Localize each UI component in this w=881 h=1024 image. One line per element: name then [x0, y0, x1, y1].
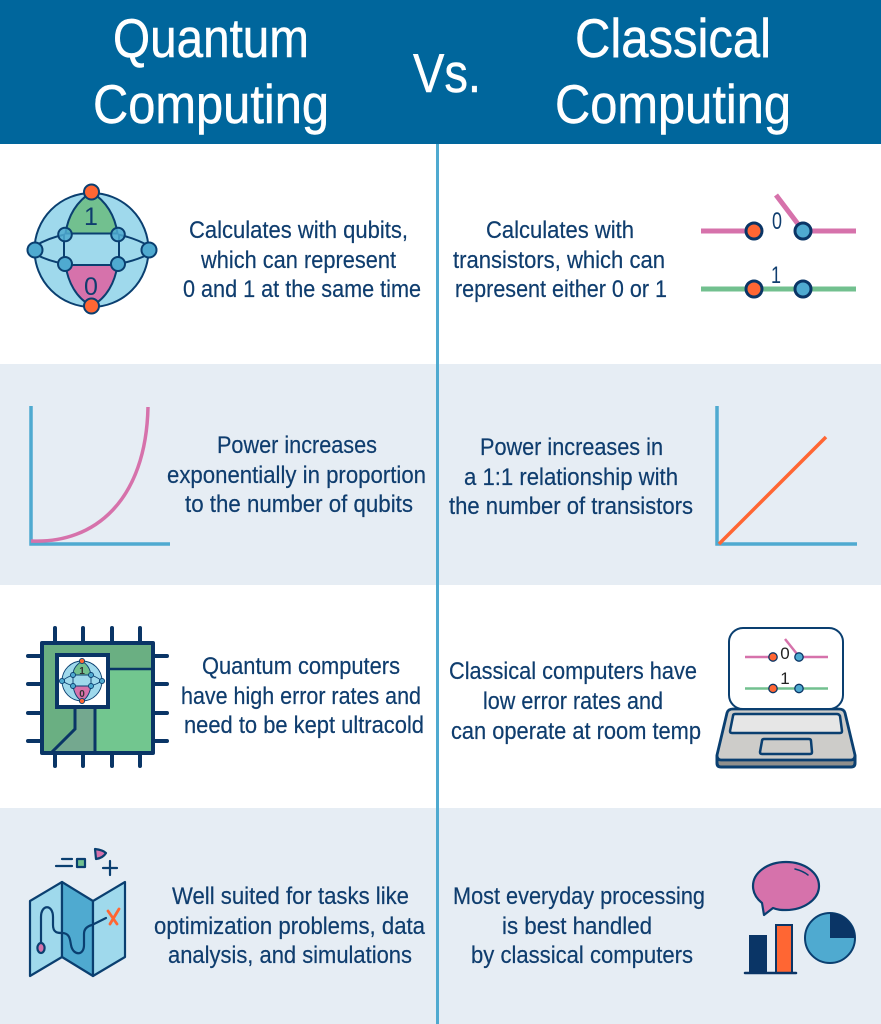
text: qubits: Calculates with qubits, — [189, 217, 408, 244]
center divider — [436, 144, 439, 1024]
text: transistors: transistors, which can — [453, 247, 665, 274]
icon: small qubit sphere — [59, 658, 105, 704]
icon: quantum chip — [28, 628, 167, 766]
panel: row 1 qubits vs transistors — [28, 184, 856, 314]
text: low error rates: low error rates and — [483, 688, 663, 715]
icon: qubit sphere — [28, 184, 156, 314]
icon: small qubit sphere: 1 — [79, 666, 85, 677]
icon: transistor switches: 1 — [771, 262, 781, 289]
icon: speech bubble, bars and pie — [745, 862, 855, 973]
heading: Classical Computing: Classical — [575, 7, 771, 69]
heading: Quantum Computing — [93, 7, 329, 135]
text: linear power: Power increases in — [480, 434, 663, 461]
text: qubits — [183, 217, 421, 303]
header banner — [0, 0, 881, 144]
text: classical uses: is best handled — [502, 913, 652, 940]
text: low error rates — [449, 658, 701, 745]
icon: small qubit sphere: 0 — [79, 689, 85, 700]
text: transistors: represent either 0 or 1 — [455, 276, 667, 303]
text: linear power: a 1:1 relationship with — [464, 464, 678, 491]
text: high error rates: have high error rates and — [181, 683, 421, 710]
text: classical uses — [453, 883, 705, 969]
heading: Quantum Computing: Quantum — [113, 7, 309, 69]
text: quantum uses: analysis, and simulations — [168, 942, 412, 969]
icon: laptop: 1 — [780, 669, 790, 688]
icon: laptop: 0 — [780, 644, 790, 663]
text: quantum uses: optimization problems, data — [154, 913, 426, 940]
text: qubits: 0 and 1 at the same time — [183, 276, 421, 303]
heading: Quantum Computing: Computing — [93, 73, 329, 135]
text: quantum uses — [154, 883, 426, 969]
text: classical uses: by classical computers — [471, 942, 693, 969]
icon: transistor switches: 0 — [772, 208, 782, 235]
heading: Classical Computing: Computing — [555, 73, 791, 135]
icon: transistor switches — [701, 195, 856, 297]
text: high error rates: Quantum computers — [202, 653, 400, 680]
icon: laptop — [717, 628, 855, 767]
heading: Classical Computing — [555, 7, 791, 135]
heading: Vs.: Vs. — [413, 42, 481, 104]
panel: row 2 power growth — [31, 406, 857, 544]
panel: row 4 best uses — [30, 849, 855, 976]
text: exponential power: exponentially in proportion — [167, 462, 426, 489]
text: low error rates: can operate at room temp — [451, 718, 701, 745]
text: high error rates: need to be kept ultracold — [184, 712, 424, 739]
text: qubits: which can represent — [200, 247, 396, 274]
icon: map with route — [30, 849, 125, 976]
icon: qubit sphere: 0 — [84, 273, 98, 301]
icon: qubit sphere: 1 — [84, 203, 98, 231]
text: linear power: the number of transistors — [449, 493, 693, 520]
panel: row 3 error rates — [28, 628, 855, 767]
chart: exponential curve — [31, 406, 170, 544]
chart: linear line — [717, 406, 857, 544]
text: exponential power: to the number of qubits — [185, 491, 413, 518]
text: exponential power — [167, 432, 426, 518]
text: low error rates: Classical computers have — [449, 658, 697, 685]
text: exponential power: Power increases — [217, 432, 377, 459]
text: classical uses: Most everyday processing — [453, 883, 705, 910]
text: high error rates — [181, 653, 424, 739]
text: transistors: Calculates with — [486, 217, 634, 244]
text: linear power — [449, 434, 693, 520]
text: transistors — [453, 217, 667, 303]
text: quantum uses: Well suited for tasks like — [172, 883, 409, 910]
